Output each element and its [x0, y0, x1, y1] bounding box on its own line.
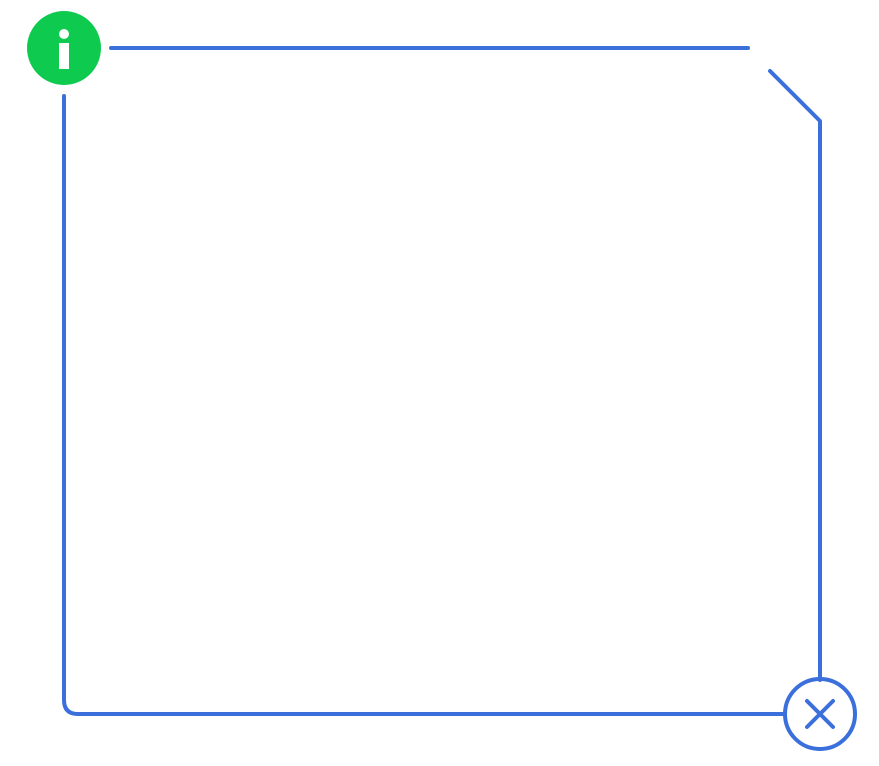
- icon: info: [27, 11, 101, 85]
- icon: close: [785, 679, 855, 749]
- frame border: [64, 48, 820, 714]
